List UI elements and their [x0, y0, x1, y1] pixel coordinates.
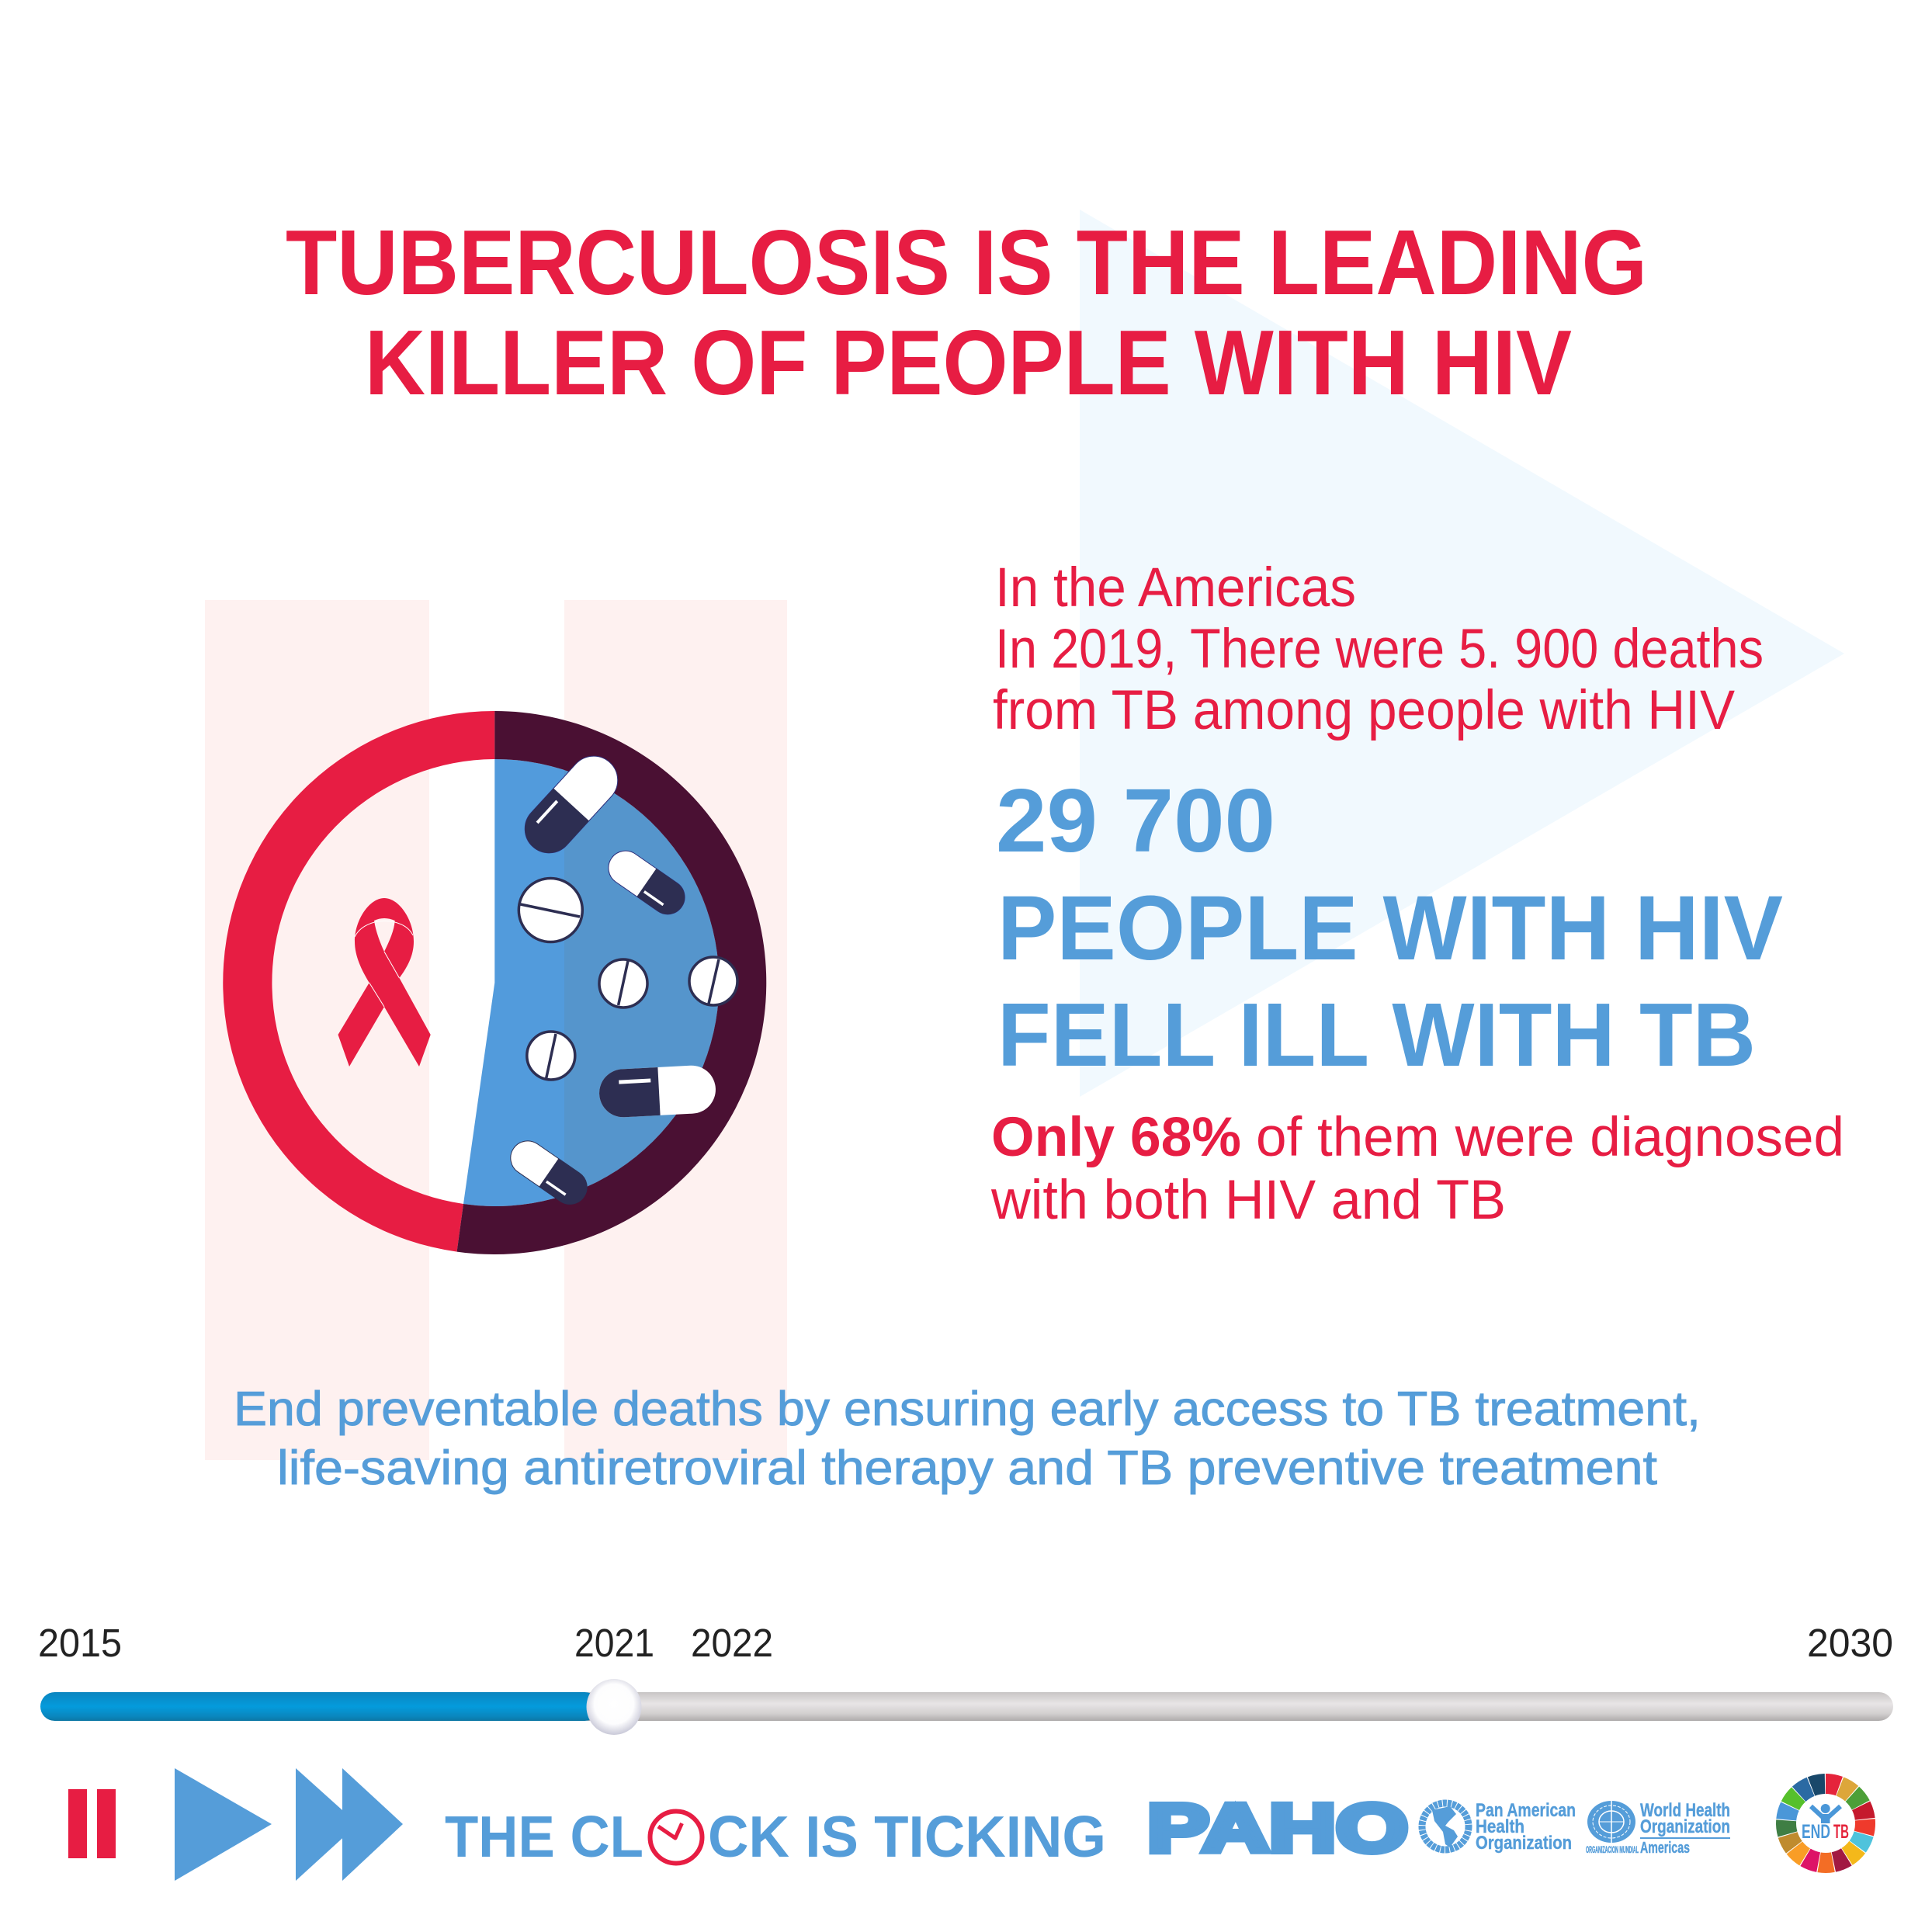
- icon: large capsule lower right: [598, 1064, 717, 1119]
- icon: tablet lower: [527, 1032, 575, 1080]
- text block: deaths in the Americas: [993, 557, 1764, 741]
- title: TUBERCULOSIS IS THE LEADING: [286, 211, 1647, 314]
- logo: Pan American Health Organization: Health: [1476, 1816, 1524, 1837]
- logo: End TB wheel: TB: [1833, 1821, 1849, 1843]
- slogan: the clock is ticking: THE CL: [445, 1804, 643, 1869]
- logo: PAHO wordmark: PAHO: [1147, 1791, 1408, 1866]
- icon: pause: [68, 1789, 116, 1858]
- call to action text: End preventable deaths by ensuring early access to TB treatment,: [234, 1382, 1701, 1436]
- background pause bar: right: [564, 600, 787, 1460]
- text block: deaths in the Americas: In the Americas: [995, 557, 1356, 619]
- key figure: 29 700 people with HIV fell ill with TB: [996, 770, 1783, 1085]
- text block: deaths in the Americas: In 2019, There were 5. 900 deaths: [995, 619, 1764, 680]
- emblem: PAHO: [1422, 1803, 1469, 1850]
- logo: World Health Organization Americas: Americas: [1640, 1840, 1690, 1857]
- icon: person with raised arms: [1811, 1804, 1840, 1823]
- year labels: 2015: [38, 1621, 122, 1665]
- call to action text: life-saving antiretroviral therapy and TB preventive treatment: [277, 1441, 1657, 1495]
- sustainable development goals colour wheel: [1770, 1767, 1882, 1879]
- year labels: 2021: [574, 1621, 654, 1665]
- logo: Pan American Health Organization: Pan American: [1476, 1800, 1576, 1821]
- key figure: 29 700 people with HIV fell ill with TB: 29 700: [996, 770, 1275, 871]
- icon: capsule bottom: [504, 1134, 594, 1211]
- icon: red HIV ribbon: [338, 898, 431, 1067]
- icon: play: [175, 1768, 272, 1881]
- logo: World Health Organization Americas: [1586, 1800, 1730, 1857]
- icon: capsule upper right: [602, 845, 692, 921]
- timeline slider: [38, 1621, 1893, 1735]
- icon: capsule top: [515, 746, 628, 863]
- text block: deaths in the Americas: from TB among people with HIV: [993, 680, 1736, 741]
- icon: large tablet: [519, 879, 582, 942]
- logo: World Health Organization Americas: ORGANIZACION MUNDIAL: [1586, 1844, 1639, 1855]
- emblem: WHO: [1587, 1800, 1635, 1845]
- icon: tablet right: [689, 957, 737, 1005]
- dark ring segment: [457, 711, 766, 1254]
- text block: diagnosis share: Only 68%: [991, 1107, 1241, 1168]
- text block: diagnosis share: [990, 1107, 1844, 1231]
- year labels: 2022: [691, 1621, 773, 1665]
- grey remaining track: [574, 1692, 1893, 1721]
- year labels: [38, 1621, 1893, 1665]
- slider knob: [587, 1679, 641, 1735]
- text block: diagnosis share: of them were diagnosed: [1256, 1107, 1844, 1168]
- red ring segment: [223, 711, 494, 1252]
- key figure: 29 700 people with HIV fell ill with TB: PEOPLE WITH HIV: [997, 877, 1783, 980]
- key figure: 29 700 people with HIV fell ill with TB: FELL ILL WITH TB: [997, 984, 1756, 1085]
- slogan: the clock is ticking: [445, 1804, 1106, 1869]
- slogan: the clock is ticking: CK IS TICKING: [708, 1804, 1106, 1869]
- blue elapsed track: [40, 1692, 599, 1721]
- call to action text: [234, 1382, 1701, 1495]
- donut chart: share of people with HIV and TB diagnosed: [223, 711, 766, 1254]
- icon: fast forward: [296, 1768, 403, 1881]
- title: [286, 211, 1647, 414]
- blue treated segment: [463, 759, 719, 1206]
- logo: Pan American Health Organization: Organization: [1476, 1833, 1572, 1854]
- logo: Pan American Health Organization: [1422, 1800, 1576, 1854]
- icon: clock: [650, 1812, 702, 1863]
- logo: World Health Organization Americas: World Health: [1640, 1800, 1730, 1821]
- logo: End TB wheel: [1770, 1767, 1882, 1879]
- text block: diagnosis share: with both HIV and TB: [990, 1170, 1506, 1231]
- logo: End TB wheel: END: [1802, 1821, 1830, 1843]
- background play triangle: [1080, 210, 1844, 1097]
- logo: World Health Organization Americas: Organization: [1640, 1816, 1730, 1837]
- year labels: 2030: [1807, 1621, 1893, 1665]
- background pause bar: left: [205, 600, 429, 1460]
- icon: tablet center: [599, 959, 647, 1008]
- title: KILLER OF PEOPLE WITH HIV: [365, 311, 1572, 414]
